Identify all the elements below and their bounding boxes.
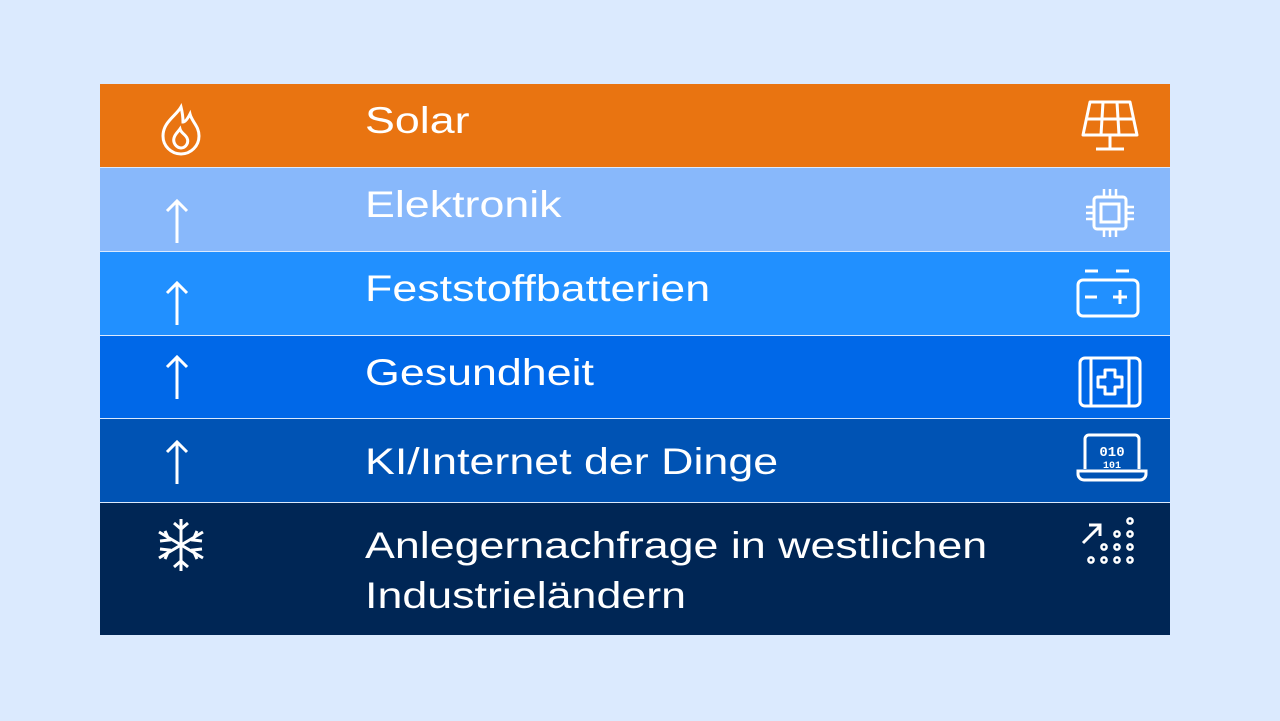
panel: table (100, 84, 1170, 635)
text: Anlegernachfrage (365, 525, 987, 616)
icon: growth dots (1082, 517, 1134, 564)
icon: chip (1086, 189, 1134, 237)
row: Feststoffbatterien (100, 252, 1170, 335)
icon: first aid kit (1078, 356, 1142, 408)
row: Gesundheit (100, 336, 1170, 418)
icon: laptop binary (1076, 434, 1148, 482)
icon: battery (1076, 270, 1140, 318)
icon: laptop binary: 101 (1103, 461, 1121, 472)
icon: solar panel (1082, 100, 1138, 150)
icon: flame (162, 103, 200, 156)
icon: snowflake (158, 519, 204, 571)
text: Feststoffbatterien: Feststoffbatterien (365, 268, 710, 309)
text: Elektronik: Elektronik (365, 184, 562, 225)
icon: arrow up (166, 199, 188, 243)
row: Elektronik (100, 168, 1170, 251)
text: Gesundheit: Gesundheit (365, 352, 594, 393)
text: Anlegernachfrage: Anlegernachfrage in westlichen (365, 525, 987, 566)
text: KI/Internet der Dinge: KI/Internet der Dinge (365, 441, 778, 482)
row: KI (100, 419, 1170, 502)
row: Solar (100, 84, 1170, 167)
icon: laptop binary: 010 (1099, 445, 1125, 461)
icon: arrow up (166, 355, 188, 399)
text: Solar: Solar (365, 100, 470, 141)
icon: arrow up (166, 281, 188, 325)
icon: arrow up (166, 440, 188, 484)
text: Anlegernachfrage: Industrieländern (365, 575, 686, 616)
row: Anlegernachfrage (100, 503, 1170, 635)
